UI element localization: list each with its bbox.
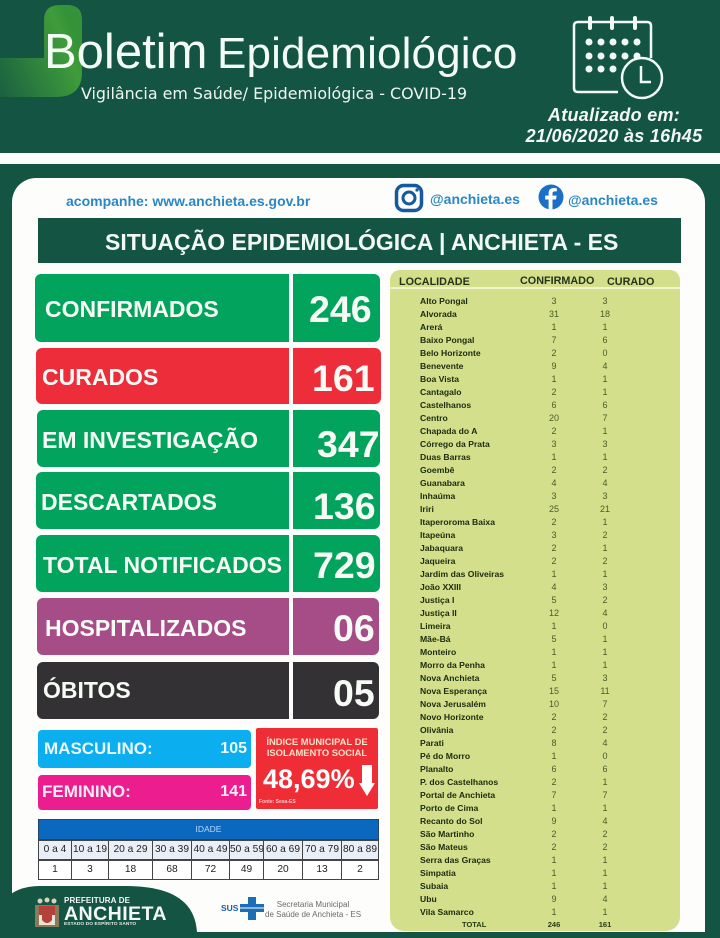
rows: 2 (551, 777, 556, 787)
rows: 7 (602, 790, 608, 800)
logo: prefeitura text: PREFEITURA DE (64, 896, 130, 905)
rows: 4 (602, 816, 608, 826)
age columns: 20 a 29 (114, 844, 148, 855)
rows: 2 (551, 517, 556, 527)
rows: Vila Samarco (420, 907, 474, 917)
rows: Itapeúna (420, 530, 455, 540)
section title (38, 218, 681, 263)
rows: 4 (602, 738, 608, 748)
age columns: 30 a 39 (155, 844, 189, 855)
rows: Alto Pongal (420, 296, 468, 306)
rows: Iriri (420, 504, 434, 514)
rows: 2 (602, 530, 608, 540)
panel: óbitos (37, 662, 379, 719)
source: Fonte: Sesa-ES (259, 799, 296, 805)
rows: 3 (602, 439, 608, 449)
rows: 15 (549, 686, 559, 696)
age columns: 70 a 79 (305, 844, 339, 855)
rows: 1 (602, 777, 608, 787)
rows: 1 (551, 907, 556, 917)
label (37, 410, 289, 467)
age columns: 80 a 89 (343, 844, 377, 855)
rows: 3 (602, 296, 608, 306)
update date: 21/06/2020 às 16h45 (526, 126, 702, 146)
value (293, 274, 380, 342)
rows: 2 (551, 465, 556, 475)
age columns: 72 (205, 864, 216, 875)
instagram handle: @anchieta.es (430, 191, 520, 207)
panel: descartados (36, 472, 380, 529)
panel: curados (36, 348, 381, 404)
rows: 2 (551, 725, 556, 735)
rows: 1 (551, 803, 556, 813)
age columns: 49 (241, 864, 252, 875)
rows: João XXIII (420, 582, 461, 592)
rows: Guanabara (420, 478, 465, 488)
value: 347 (317, 423, 380, 465)
total row: TOTAL (462, 920, 486, 929)
label: DESCARTADOS (41, 489, 217, 515)
age table header (38, 819, 379, 840)
age columns: 50 a 59 (230, 844, 264, 855)
rows: 1 (551, 374, 556, 384)
rows: 1 (602, 803, 608, 813)
rows: 2 (551, 387, 556, 397)
rows: Castelhanos (420, 400, 471, 410)
rows: 1 (602, 322, 608, 332)
secretariat text: Secretaria Municipal (277, 900, 349, 909)
rows: 2 (602, 595, 608, 605)
white stripe (0, 153, 720, 164)
rows: Monteiro (420, 647, 456, 657)
rows: 2 (551, 842, 556, 852)
rows: 2 (551, 348, 556, 358)
rows: 1 (551, 647, 556, 657)
rows: 25 (549, 504, 559, 514)
rows: 7 (602, 413, 608, 423)
rows: 12 (549, 608, 559, 618)
rows: Centro (420, 413, 448, 423)
callout heading: ÍNDICE MUNICIPAL DE (266, 736, 368, 747)
label: HOSPITALIZADOS (45, 615, 246, 641)
rows: 3 (551, 296, 556, 306)
rows: Justiça II (420, 608, 457, 618)
rows: Belo Horizonte (420, 348, 481, 358)
rows: 4 (602, 608, 608, 618)
label: CURADOS (42, 364, 158, 390)
rows: 1 (551, 881, 556, 891)
total row: 161 (599, 920, 611, 929)
rows: 4 (602, 478, 608, 488)
age columns: 0 a 4 (44, 844, 66, 855)
rows: 1 (602, 855, 608, 865)
locality table header: CURADO (607, 276, 654, 288)
rows: 1 (602, 452, 608, 462)
rows: 5 (551, 634, 556, 644)
rows: Parati (420, 738, 444, 748)
follow website: acompanhe: www.anchieta.es.gov.br (66, 193, 310, 209)
locality table header (390, 273, 680, 289)
rows: 2 (551, 556, 556, 566)
rows: 0 (602, 348, 608, 358)
rows: 9 (551, 361, 556, 371)
label: CONFIRMADOS (45, 296, 219, 322)
panel: em investigação (37, 410, 380, 467)
age columns: 40 a 49 (194, 844, 228, 855)
rows: Porto de Cima (420, 803, 478, 813)
rows: 6 (602, 400, 608, 410)
value (293, 598, 379, 655)
rows: 1 (602, 881, 608, 891)
age columns: 2 (357, 864, 363, 875)
rows: 6 (602, 335, 608, 345)
age columns: 1 (52, 864, 58, 875)
rows: 0 (602, 621, 608, 631)
rows: São Mateus (420, 842, 468, 852)
rows: 11 (600, 686, 610, 696)
label (37, 662, 289, 719)
age columns: 18 (125, 864, 136, 875)
rows: 3 (551, 530, 556, 540)
rows: 5 (551, 595, 556, 605)
rows: 1 (602, 374, 608, 384)
rows: Boa Vista (420, 374, 459, 384)
rows: Subaia (420, 881, 448, 891)
age columns: 68 (166, 864, 178, 875)
icon: down arrow (359, 765, 375, 796)
rows: 2 (602, 712, 608, 722)
rows: 1 (551, 660, 556, 670)
rows: 1 (551, 569, 556, 579)
rows: Arerá (420, 322, 442, 332)
rows: Planalto (420, 764, 453, 774)
rows: 2 (602, 829, 608, 839)
rows: 7 (551, 335, 556, 345)
rows: 2 (602, 725, 608, 735)
rows: 8 (551, 738, 556, 748)
rows: 7 (602, 699, 608, 709)
age columns: 60 a 69 (266, 844, 300, 855)
total row (462, 920, 612, 929)
panel: total notificados (36, 535, 380, 592)
rows: 21 (600, 504, 610, 514)
rows: Duas Barras (420, 452, 471, 462)
rows: 18 (600, 309, 610, 319)
title: Epidemiológico: Epidemiológico (217, 29, 518, 78)
locality table header: CONFIRMADO (520, 275, 594, 287)
rows: 1 (602, 543, 608, 553)
label: MASCULINO: (44, 739, 153, 758)
value (293, 472, 380, 529)
rows: Cantagalo (420, 387, 462, 397)
rows: 6 (551, 764, 556, 774)
label: TOTAL NOTIFICADOS (43, 552, 282, 578)
rows: Serra das Graças (420, 855, 491, 865)
rows: Nova Esperança (420, 686, 487, 696)
value: 105 (220, 740, 247, 757)
rows: 1 (602, 426, 608, 436)
callout heading: ISOLAMENTO SOCIAL (267, 747, 367, 758)
rows: Baixo Pongal (420, 335, 474, 345)
value (293, 410, 380, 467)
rows: 4 (551, 478, 556, 488)
rows: 3 (602, 673, 608, 683)
rows: 2 (551, 426, 556, 436)
green check shape (0, 5, 82, 97)
rows: 1 (602, 907, 608, 917)
panel: feminino (38, 775, 251, 810)
rows: Pé do Morro (420, 751, 470, 761)
rows: Olivânia (420, 725, 453, 735)
rows: Recanto do Sol (420, 816, 483, 826)
rows: 1 (551, 621, 556, 631)
rows: 1 (602, 647, 608, 657)
rows: 3 (551, 491, 556, 501)
rows: 4 (551, 582, 556, 592)
rows: Alvorada (420, 309, 457, 319)
label: EM INVESTIGAÇÃO (42, 427, 258, 453)
update label: Atualizado em: (548, 105, 680, 125)
facebook handle: @anchieta.es (568, 192, 658, 208)
rows: Jabaquara (420, 543, 463, 553)
rows: Goembê (420, 465, 454, 475)
rows: 1 (602, 517, 608, 527)
callout: índice de isolamento social (256, 728, 378, 809)
rows: Jardim das Oliveiras (420, 569, 504, 579)
label: ÓBITOS (43, 677, 131, 703)
rows: Nova Jerusalém (420, 699, 486, 709)
label (36, 472, 289, 529)
secretariat text: de Saúde de Anchieta - ES (265, 910, 361, 919)
subtitle: Vigilância em Saúde/ Epidemiológica - COVID-19 (81, 84, 467, 103)
rows: Chapada do A (420, 426, 477, 436)
icon: crest (35, 898, 59, 927)
rows: 2 (602, 556, 608, 566)
logo: state text: ESTADO DO ESPÍRITO SANTO (64, 922, 136, 927)
label (37, 598, 289, 655)
rows: 31 (549, 309, 559, 319)
main white panel (12, 178, 705, 932)
rows: Jaqueira (420, 556, 455, 566)
value: 06 (333, 607, 375, 649)
section title: SITUAÇÃO EPIDEMIOLÓGICA | ANCHIETA - ES (105, 229, 618, 255)
value: 136 (313, 485, 376, 527)
value: 05 (333, 672, 375, 714)
rows: 20 (549, 413, 559, 423)
rows: 1 (551, 855, 556, 865)
rows: Novo Horizonte (420, 712, 484, 722)
label (35, 274, 289, 342)
value (293, 662, 379, 719)
rows: 1 (602, 660, 608, 670)
locality table header: LOCALIDADE (399, 276, 470, 288)
rows: Portal de Anchieta (420, 790, 495, 800)
rows: Inhaúma (420, 491, 455, 501)
rows: 3 (602, 491, 608, 501)
rows: 2 (551, 712, 556, 722)
rows: 3 (602, 582, 608, 592)
logo: SUS text: SUS (221, 903, 238, 913)
rows: São Martinho (420, 829, 474, 839)
rows: 4 (602, 361, 608, 371)
label (36, 348, 289, 404)
header band (0, 0, 720, 153)
age columns: 13 (316, 864, 328, 875)
rows: 6 (551, 400, 556, 410)
rows: Limeira (420, 621, 451, 631)
locality table (390, 270, 680, 931)
value: 246 (309, 288, 372, 330)
value (293, 535, 380, 592)
rows: Morro da Penha (420, 660, 485, 670)
value: 161 (312, 357, 375, 399)
rows: 4 (602, 894, 608, 904)
rows: 7 (551, 790, 556, 800)
rows: 9 (551, 816, 556, 826)
rows: 6 (602, 764, 608, 774)
age table header: IDADE (196, 824, 221, 834)
rows: 2 (551, 829, 556, 839)
icon: instagram (394, 184, 424, 212)
rows: 2 (602, 465, 608, 475)
rows: P. dos Castelhanos (420, 777, 498, 787)
logo: anchieta text: ANCHIETA (64, 903, 167, 925)
age columns: 10 a 19 (73, 844, 107, 855)
rows: Mãe-Bá (420, 634, 451, 644)
panel: hospitalizados (37, 598, 379, 655)
icon: facebook (538, 184, 564, 210)
rows: 1 (602, 868, 608, 878)
rows: Nova Anchieta (420, 673, 479, 683)
title: Boletim: Boletim (44, 25, 207, 79)
rows: 5 (551, 673, 556, 683)
total row: 246 (548, 920, 560, 929)
label: FEMININO: (42, 782, 131, 801)
value (293, 348, 381, 404)
rows: Benevente (420, 361, 463, 371)
rows: 1 (551, 751, 556, 761)
secretariat text (265, 900, 361, 919)
callout value: 48,69% (263, 764, 355, 794)
age columns: 20 (277, 864, 289, 875)
age columns (38, 840, 379, 880)
rows (420, 296, 610, 917)
rows: 0 (602, 751, 608, 761)
rows: 2 (551, 543, 556, 553)
panel: confirmados (35, 274, 380, 342)
rows: Simpatia (420, 868, 456, 878)
rows: 9 (551, 894, 556, 904)
rows: 1 (602, 634, 608, 644)
rows: Ubu (420, 894, 437, 904)
rows: 1 (551, 322, 556, 332)
age table (38, 819, 379, 880)
value: 141 (220, 783, 247, 800)
value: 729 (313, 544, 376, 586)
rows: 1 (551, 452, 556, 462)
footer shape (12, 886, 197, 932)
rows: Itaperoroma Baixa (420, 517, 495, 527)
age columns: 3 (87, 864, 93, 875)
icon: SUS cross (240, 897, 264, 920)
label (36, 535, 289, 592)
rows: 2 (602, 842, 608, 852)
rows: Córrego da Prata (420, 439, 490, 449)
callout heading (266, 736, 368, 758)
rows: Justiça I (420, 595, 454, 605)
rows: 3 (551, 439, 556, 449)
rows: 1 (551, 868, 556, 878)
icon: calendar with clock (572, 16, 664, 100)
panel: masculino (38, 730, 251, 768)
rows: 1 (602, 387, 608, 397)
rows: 10 (549, 699, 559, 709)
rows: 1 (602, 569, 608, 579)
